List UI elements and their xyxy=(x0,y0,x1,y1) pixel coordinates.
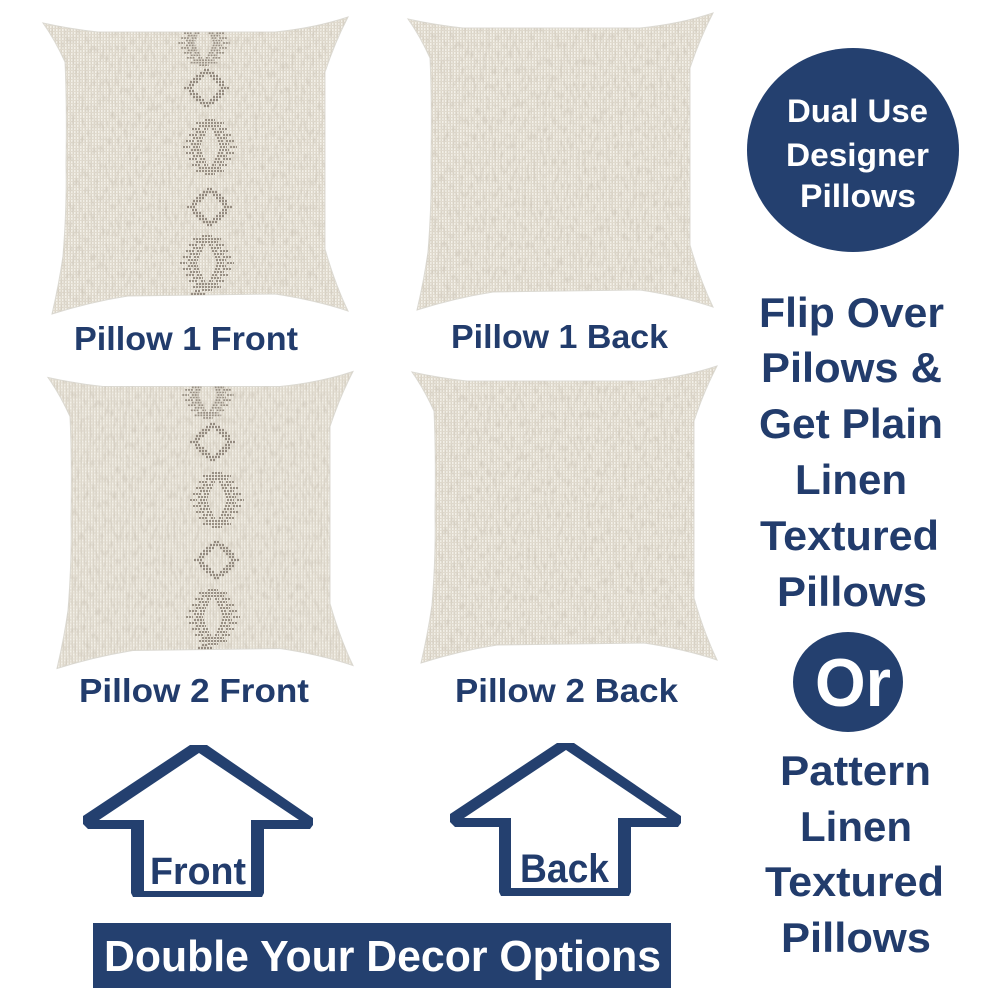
label: pillow 1 back: Pillow 1 Back xyxy=(451,318,669,355)
badge: dual use designer pillows: Dual Use xyxy=(787,93,928,129)
arrow: front xyxy=(83,745,313,897)
badge: dual use designer pillows: Pillows xyxy=(800,178,916,214)
badge: or: Or xyxy=(815,645,891,721)
text: pattern linen pillows: Pattern xyxy=(780,747,931,794)
text: flip over pillows: Linen xyxy=(795,456,907,503)
text: flip over pillows: Get Plain xyxy=(759,400,943,447)
label: pillow 1 front: Pillow 1 Front xyxy=(74,320,298,357)
pattern: pillow 2 front motifs xyxy=(182,386,244,650)
text: pattern linen pillows: Textured xyxy=(765,858,944,905)
text: flip over pillows: Flip Over xyxy=(759,289,944,336)
label: pillow 2 back: Pillow 2 Back xyxy=(455,672,679,709)
badge: or xyxy=(793,632,903,732)
text: pattern linen pillows xyxy=(765,747,944,961)
text: pattern linen pillows: Pillows xyxy=(781,914,931,961)
label: pillow 2 front: Pillow 2 Front xyxy=(79,672,309,709)
pillow 1 front xyxy=(42,16,349,315)
arrow: back xyxy=(450,743,681,896)
text: flip over pillows xyxy=(759,289,944,615)
label: back: Back xyxy=(520,847,610,891)
pillow 2 front xyxy=(47,370,354,670)
pillow 1 back xyxy=(400,5,725,320)
text: flip over pillows: Pilows & xyxy=(761,344,942,391)
pillow 2 back xyxy=(404,358,729,673)
text: flip over pillows: Textured xyxy=(760,512,939,559)
badge: dual use designer pillows xyxy=(747,48,959,252)
banner: double your decor options: Double Your Decor Options xyxy=(104,932,661,981)
text: pattern linen pillows: Linen xyxy=(800,803,912,850)
label: front: Front xyxy=(150,851,246,893)
pattern: pillow 1 front motifs xyxy=(178,32,237,295)
text: flip over pillows: Pillows xyxy=(777,568,927,615)
badge: dual use designer pillows: Designer xyxy=(786,137,929,173)
